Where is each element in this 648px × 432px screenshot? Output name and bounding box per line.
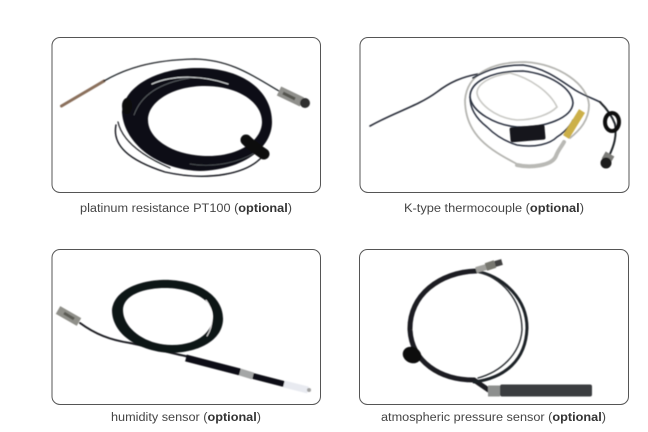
panel: humidity sensor: [52, 250, 320, 424]
icon: thermocouple with loops of cable: [370, 62, 619, 168]
panel: platinum resistance PT100: [52, 38, 320, 215]
panel: K-type thermocouple: [360, 38, 629, 215]
caption: K-type thermocouple: K-type thermocouple ( optional ): [404, 203, 584, 215]
caption: atmospheric pressure sensor: atmospheric pressure sensor ( optional ): [381, 412, 606, 424]
caption: humidity sensor: humidity sensor ( optional ): [111, 412, 261, 424]
icon: PT100 sensor with coiled cable: [62, 59, 310, 176]
panel: atmospheric pressure sensor: [360, 250, 628, 424]
icon: pressure sensor with cable loop: [400, 262, 592, 396]
caption: platinum resistance PT100: platinum resistance PT100 ( optional ): [80, 203, 292, 215]
icon: humidity probe with coiled cable: [58, 280, 311, 392]
